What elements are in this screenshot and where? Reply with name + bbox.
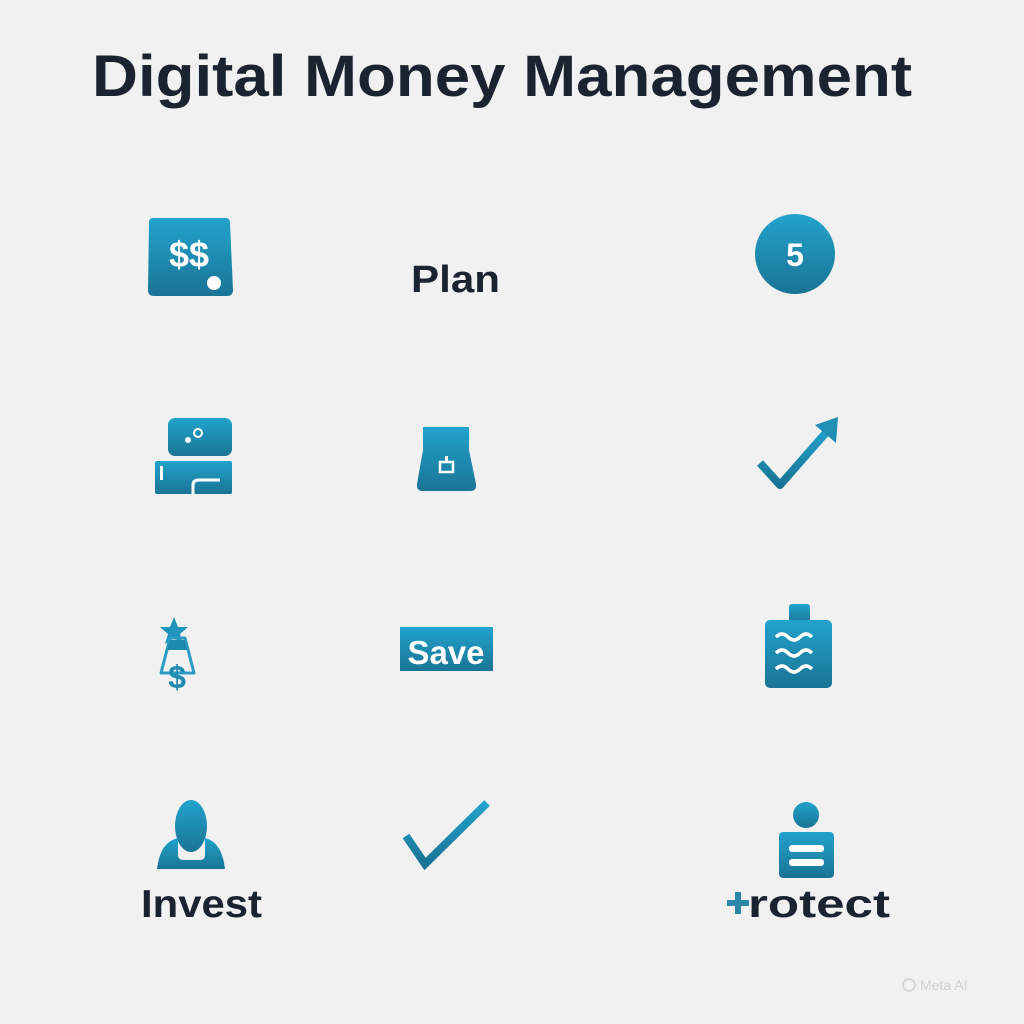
icon: water tag	[765, 604, 832, 688]
label: Protect	[727, 883, 890, 926]
label: Save	[400, 627, 493, 671]
title: Digital Money Management	[92, 44, 912, 109]
label: Protect: rotect	[748, 883, 890, 926]
icon: number 5 badge	[755, 214, 835, 294]
label: Save: Save	[407, 634, 485, 671]
icon: bottle	[417, 427, 476, 491]
icon: person document	[779, 802, 834, 878]
icon: dollar tag	[148, 218, 233, 296]
watermark: Meta AI	[920, 977, 967, 993]
icon: dollar tag: $$	[169, 234, 209, 275]
icon: number 5 badge: 5	[786, 237, 804, 273]
label: Plan: Plan	[411, 259, 500, 301]
icon: wallet stack	[155, 418, 232, 494]
icon: dollar star bag	[160, 617, 194, 695]
label: Invest: Invest	[141, 883, 262, 926]
icon: check arrow	[760, 417, 838, 485]
icon: dollar star bag: $	[168, 659, 186, 695]
icon: check	[406, 803, 487, 864]
icon: person	[157, 800, 225, 869]
